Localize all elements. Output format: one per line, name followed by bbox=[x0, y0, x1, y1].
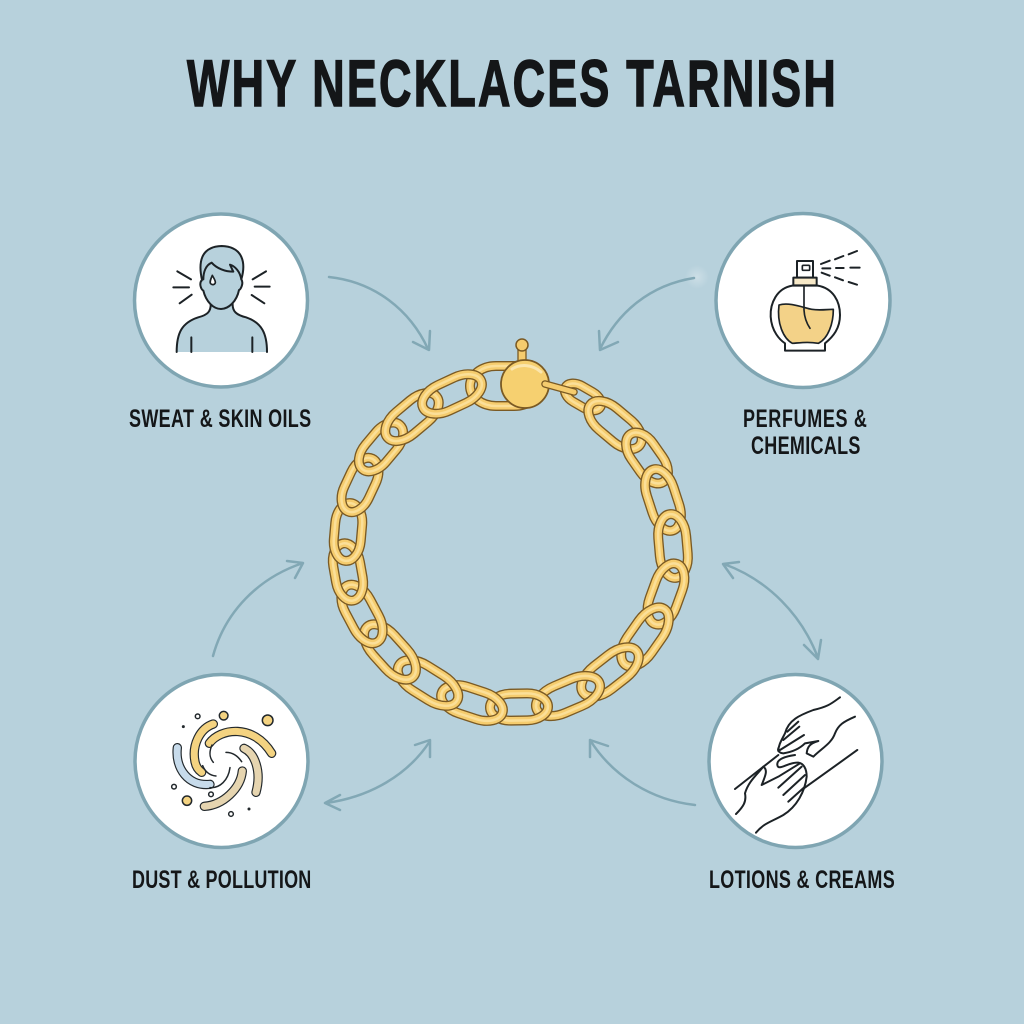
icon circle: dust bbox=[135, 674, 308, 848]
icon circle: lotions bbox=[709, 674, 882, 848]
link 10 bbox=[490, 693, 548, 721]
link 16 bbox=[332, 502, 364, 562]
label: perfumes and chemicals bbox=[743, 404, 867, 460]
panel: perfumes and chemicals bbox=[716, 214, 890, 460]
icon circle: perfume bbox=[716, 214, 890, 388]
panel: lotions and creams bbox=[709, 674, 895, 894]
chain necklace bbox=[330, 339, 690, 726]
label: perfumes and chemicals: PERFUMES & bbox=[743, 404, 867, 433]
link 13 bbox=[356, 617, 424, 687]
link 5 bbox=[656, 513, 690, 579]
link 9 bbox=[531, 669, 605, 723]
label: dust and pollution: DUST & POLLUTION bbox=[132, 865, 311, 894]
icon circle: sweat bbox=[134, 214, 308, 387]
link 4 bbox=[640, 465, 686, 535]
link 3 bbox=[619, 427, 675, 489]
link 15 bbox=[330, 541, 366, 603]
link 19 bbox=[378, 386, 446, 448]
link 2 bbox=[581, 394, 649, 456]
clasp bbox=[501, 339, 574, 408]
link 18 bbox=[352, 416, 410, 478]
icon: sweating person bbox=[173, 246, 270, 352]
label: lotions and creams: LOTIONS & CREAMS bbox=[709, 865, 895, 894]
link 14 bbox=[335, 579, 389, 649]
icon: dust swirl bbox=[172, 711, 273, 816]
link 20 bbox=[417, 368, 487, 420]
link 1 bbox=[561, 379, 605, 415]
label: sweat and skin oils: SWEAT & SKIN OILS bbox=[129, 404, 311, 433]
panel: sweat and skin oils bbox=[129, 214, 311, 433]
title: WHY NECKLACES TARNISH bbox=[187, 46, 836, 120]
link 8 bbox=[574, 640, 646, 704]
arrow: necklace and lotions bbox=[723, 562, 821, 659]
icon: hands applying lotion bbox=[735, 697, 857, 833]
link behind clasp bbox=[470, 366, 540, 406]
arrow: sweat to necklace bbox=[329, 277, 430, 350]
icon: perfume bottle bbox=[771, 251, 860, 351]
link 7 bbox=[614, 601, 676, 673]
arrow: lotions to necklace bbox=[590, 740, 695, 805]
link 11 bbox=[437, 680, 507, 726]
label: perfumes and chemicals: CHEMICALS bbox=[751, 431, 860, 460]
arrow: dust and necklace bbox=[325, 740, 430, 810]
link 12 bbox=[391, 653, 465, 713]
arrows bbox=[213, 277, 821, 810]
link 17 bbox=[336, 453, 384, 517]
arrow: perfume to necklace bbox=[599, 278, 694, 350]
panel: dust and pollution bbox=[132, 674, 311, 894]
arrow: dust to necklace bbox=[213, 561, 303, 656]
link 6 bbox=[642, 559, 690, 629]
